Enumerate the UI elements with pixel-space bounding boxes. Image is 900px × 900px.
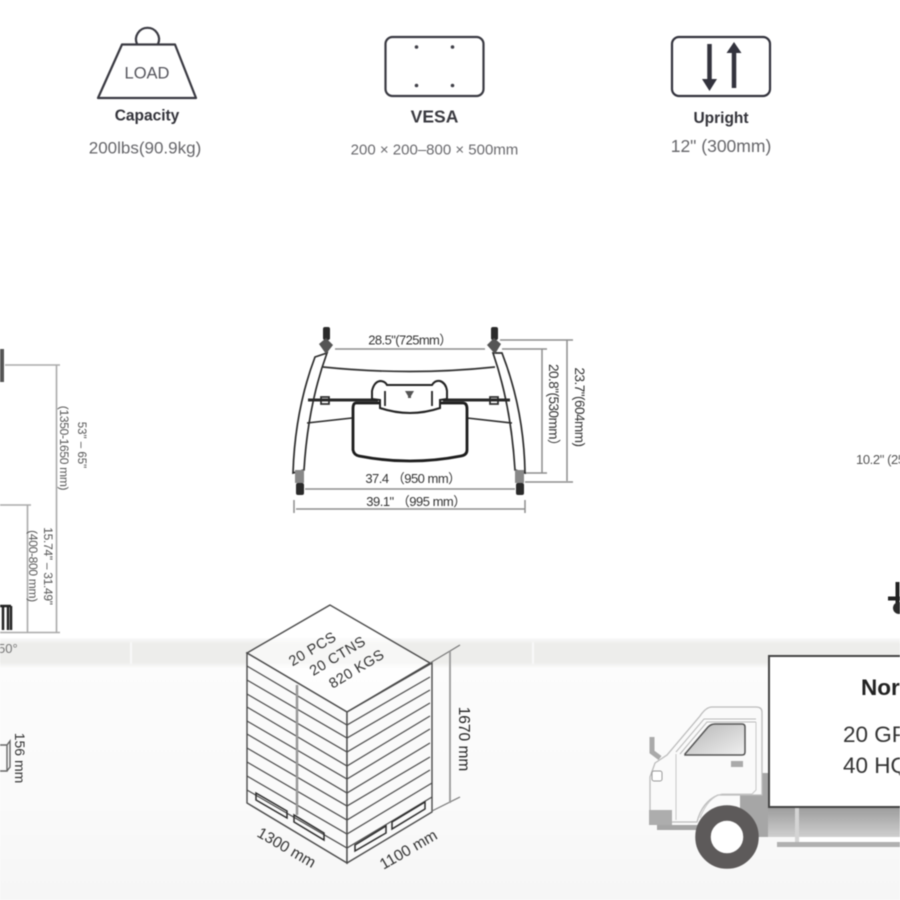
label: upper height: 53" – 65" bbox=[75, 422, 87, 468]
icon: load weight: LOAD bbox=[125, 64, 170, 82]
carton layer lines bbox=[247, 666, 432, 848]
mirror bbox=[652, 737, 660, 758]
cropped monitor edge bbox=[0, 349, 4, 382]
shelf tray bbox=[353, 403, 467, 461]
window bbox=[685, 724, 745, 755]
caster fragment bbox=[888, 582, 900, 608]
label: inner width: 37.4 （950 mm） bbox=[365, 471, 461, 486]
floor background bbox=[0, 638, 900, 900]
label: top width: 28.5"(725mm） bbox=[368, 332, 452, 348]
label: lower height metric: (400-800 mm) bbox=[26, 530, 40, 602]
value: capacity: 200lbs(90.9kg) bbox=[89, 138, 201, 158]
label: total width: 39.1" （995 mm） bbox=[366, 494, 466, 509]
wheel bbox=[703, 813, 751, 861]
chassis under cab bbox=[740, 773, 770, 837]
strap bbox=[296, 685, 298, 815]
value: VESA: 200 × 200–800 × 500mm bbox=[351, 142, 518, 158]
height dimension lines bbox=[0, 365, 60, 632]
casters and clamps bbox=[295, 327, 524, 495]
dimension lines bbox=[430, 645, 460, 811]
pallet diagram bbox=[247, 605, 472, 873]
dimension lines bbox=[294, 340, 573, 513]
label: lower height: 15.74" – 31.49" bbox=[41, 527, 55, 605]
icon: VESA plate bbox=[386, 37, 484, 96]
spec: upright bbox=[671, 37, 771, 156]
label: pallet length: 1300 mm bbox=[254, 825, 318, 872]
pallet box outline bbox=[247, 605, 432, 863]
pallet slots bbox=[256, 793, 425, 851]
foot fragment bbox=[0, 741, 10, 771]
label: 156 mm: 156 mm bbox=[12, 733, 28, 783]
right fragment: cropped side dimension bbox=[856, 452, 900, 614]
chassis under cargo box bbox=[768, 807, 900, 837]
label: pallet height: 1670 mm bbox=[455, 707, 472, 771]
truck bbox=[649, 656, 900, 861]
label: VESA: VESA bbox=[411, 106, 459, 126]
headlight bbox=[652, 771, 662, 781]
label: outer height: 23.7"(604mm) bbox=[572, 367, 587, 447]
label: upper height metric: (1350-1650 mm) bbox=[57, 406, 71, 491]
label: pallet weight: 820 KGS bbox=[326, 647, 387, 692]
horizontal arm bbox=[307, 397, 512, 423]
cargo box bbox=[769, 656, 900, 807]
label: pallet cartons: 20 CTNS bbox=[307, 634, 369, 680]
label: inner height: 20.8"(530mm） bbox=[546, 364, 561, 452]
label: capacity: Capacity bbox=[115, 108, 180, 124]
caster wheel fragment bbox=[893, 602, 900, 614]
spec: VESA bbox=[351, 37, 518, 158]
left frame leg bbox=[293, 353, 327, 473]
VESA mount bbox=[372, 381, 447, 413]
center diagram: cart front view bbox=[293, 327, 587, 513]
right frame leg bbox=[493, 353, 525, 473]
label: upright: Upright bbox=[693, 110, 749, 127]
door handle bbox=[731, 761, 743, 767]
cab door line bbox=[676, 722, 756, 820]
cab body bbox=[650, 707, 762, 822]
bumper bbox=[649, 810, 672, 825]
icon: up and down arrows bbox=[672, 37, 770, 96]
value: upright: 12" (300mm) bbox=[671, 136, 771, 156]
upper crossbar bbox=[323, 367, 495, 372]
spec: capacity bbox=[89, 28, 201, 158]
label: pallet count: 20 PCS bbox=[286, 629, 340, 670]
label: pallet width: 1100 mm bbox=[377, 827, 440, 873]
base fragment bbox=[0, 606, 11, 630]
left diagram: cropped side view dimensions bbox=[0, 349, 87, 783]
